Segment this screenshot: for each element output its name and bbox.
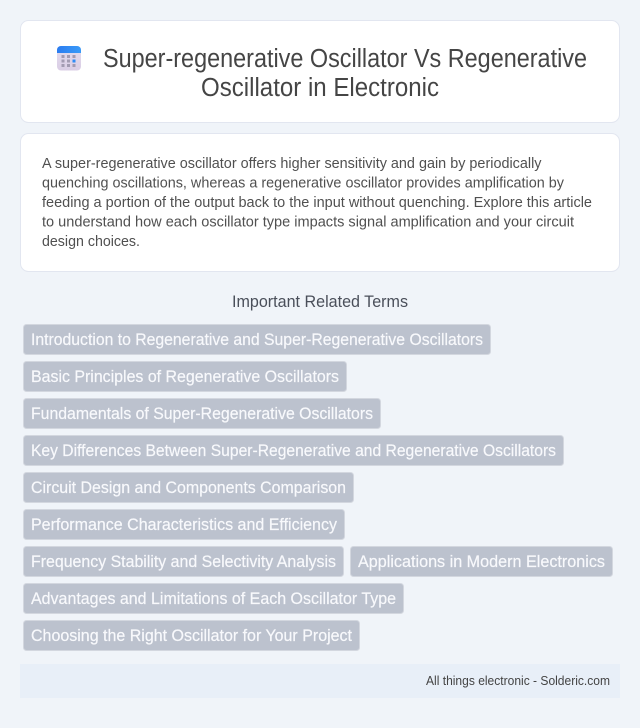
tag list: related terms — [24, 324, 612, 650]
tag: advantages — [24, 584, 404, 614]
tag: key differences — [24, 436, 564, 466]
tag: performance — [24, 510, 344, 540]
tag: choosing — [24, 620, 360, 650]
panel: introduction text — [20, 134, 620, 272]
title: Super-regenerative Oscillator Vs Regenerative — [103, 45, 587, 73]
tag: frequency stability: Frequency Stability and Selectivity Analysis — [31, 553, 336, 571]
tag: circuit design — [24, 472, 354, 502]
tag: advantages: Advantages and Limitations of Each Oscillator Type — [31, 590, 396, 608]
tag: key differences: Key Differences Between Super-Regenerative and Regenerative Oscillators — [31, 442, 556, 460]
tag: introduction — [24, 324, 490, 354]
tag: basic principles — [24, 362, 346, 392]
heading: important related terms: Important Related Terms — [232, 293, 408, 311]
panel: introduction text: feeding a portion of the output back to the input without quenching. Explore this article — [42, 194, 592, 211]
tag: introduction: Introduction to Regenerative and Super-Regenerative Oscillators — [31, 331, 483, 349]
title: Oscillator in Electronic — [201, 74, 439, 102]
panel: introduction text: quenching oscillations, whereas a regenerative oscillator provides amplification by — [42, 174, 564, 192]
footer: All things electronic - Solderic.com — [426, 673, 610, 688]
panel: introduction text: to understand how each oscillator type impacts signal amplification and your circuit — [42, 214, 575, 230]
footer — [20, 664, 620, 698]
tag: fundamentals: Fundamentals of Super-Regenerative Oscillators — [31, 405, 373, 423]
tag: basic principles: Basic Principles of Regenerative Oscillators — [31, 368, 339, 386]
title — [103, 45, 587, 102]
panel: introduction text: design choices. — [42, 233, 140, 250]
tag: performance: Performance Characteristics and Efficiency — [31, 516, 338, 534]
panel: header — [20, 20, 620, 122]
tag: choosing: Choosing the Right Oscillator for Your Project — [31, 627, 352, 645]
panel: introduction text: A super-regenerative oscillator offers higher sensitivity and gain by periodically — [42, 155, 542, 172]
tag: frequency stability — [24, 546, 344, 576]
tag: circuit design: Circuit Design and Components Comparison — [31, 479, 346, 497]
icon: calendar — [57, 46, 81, 70]
tag: applications: Applications in Modern Electronics — [358, 553, 605, 571]
tag: fundamentals — [24, 398, 380, 428]
tag: applications — [350, 546, 612, 576]
